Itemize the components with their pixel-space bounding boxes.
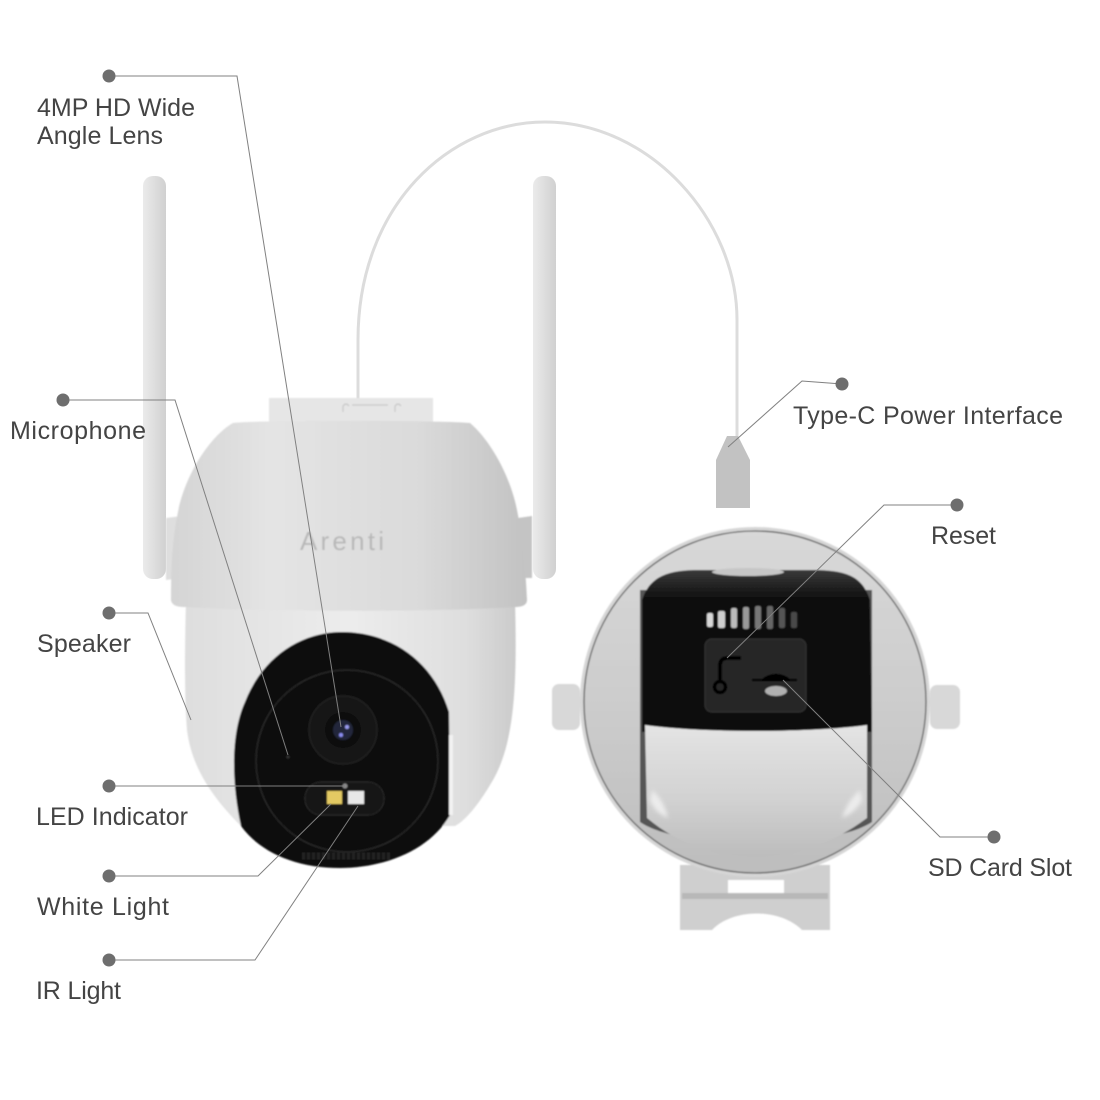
label: Speaker: Speaker	[37, 630, 131, 658]
callout lines	[63, 76, 994, 960]
light pill	[305, 782, 384, 815]
back camera	[552, 527, 960, 930]
right hinge	[518, 516, 532, 578]
label: SD Card Slot: SD Card Slot	[928, 854, 1072, 882]
dot: microphone	[56, 394, 70, 406]
right lug	[930, 685, 960, 729]
dome highlights	[650, 790, 862, 818]
wall bracket	[680, 865, 830, 930]
line: lens	[109, 76, 341, 727]
line: Type-C	[728, 381, 842, 447]
label: 4MP HD Wide Angle Lens	[37, 94, 195, 150]
reset icon	[714, 658, 741, 692]
cable	[358, 122, 737, 438]
bracket slot	[728, 880, 784, 893]
dot: SD	[988, 830, 1000, 844]
SD slot icon	[752, 674, 797, 696]
lens surround	[309, 696, 377, 764]
bracket strip	[682, 893, 828, 899]
faceplate ring	[256, 670, 438, 852]
top detail	[712, 568, 784, 576]
speaker grille	[302, 852, 392, 860]
label: 4MP HD Wide Angle Lens: Angle Lens	[37, 122, 163, 150]
lens	[324, 711, 362, 749]
black module	[642, 570, 872, 732]
line: SD	[783, 680, 994, 837]
recess	[640, 590, 872, 843]
left lug	[552, 684, 580, 730]
label: Reset: Reset	[931, 522, 996, 550]
label: White Light: White Light	[37, 893, 169, 921]
access panel	[705, 639, 806, 712]
mount collar	[269, 398, 433, 424]
right antenna	[533, 176, 556, 579]
outer sphere	[580, 527, 930, 877]
IR light	[348, 791, 364, 804]
line: LED	[109, 785, 345, 787]
label: IR Light: IR Light	[36, 977, 121, 1005]
dome housing	[171, 421, 527, 611]
icon: Type-C connector	[716, 436, 750, 508]
line: IR	[109, 806, 358, 960]
LED indicator	[342, 784, 348, 788]
dot: speaker	[102, 606, 116, 620]
collar marking	[343, 404, 401, 412]
dot: lens	[102, 70, 116, 82]
white side strip	[449, 735, 453, 815]
dot: white light	[102, 870, 116, 882]
microphone hole	[286, 756, 290, 758]
vents	[707, 606, 797, 629]
dot: reset	[950, 498, 964, 512]
callout dots	[56, 70, 1000, 966]
lower dome	[645, 725, 867, 857]
label: Type-C Power Interface: Type-C Power Interface	[793, 402, 1063, 430]
line: microphone	[63, 400, 288, 755]
label: Microphone: Microphone	[10, 417, 146, 445]
left antenna	[143, 176, 166, 579]
logo: Arenti: Arenti	[300, 526, 384, 556]
label: 4MP HD Wide Angle Lens: 4MP HD Wide	[37, 94, 195, 122]
dot: Type-C	[836, 378, 848, 390]
front camera	[166, 398, 532, 868]
label: LED Indicator: LED Indicator	[36, 803, 188, 831]
lower body	[185, 600, 516, 826]
line: speaker	[109, 613, 191, 720]
dot: LED	[102, 780, 116, 792]
line: reset	[727, 505, 957, 658]
line: white light	[109, 804, 331, 876]
dot: IR	[102, 954, 116, 966]
white light	[327, 791, 342, 804]
inner sphere	[584, 531, 926, 873]
black camera head	[234, 632, 450, 868]
left hinge	[166, 516, 182, 580]
